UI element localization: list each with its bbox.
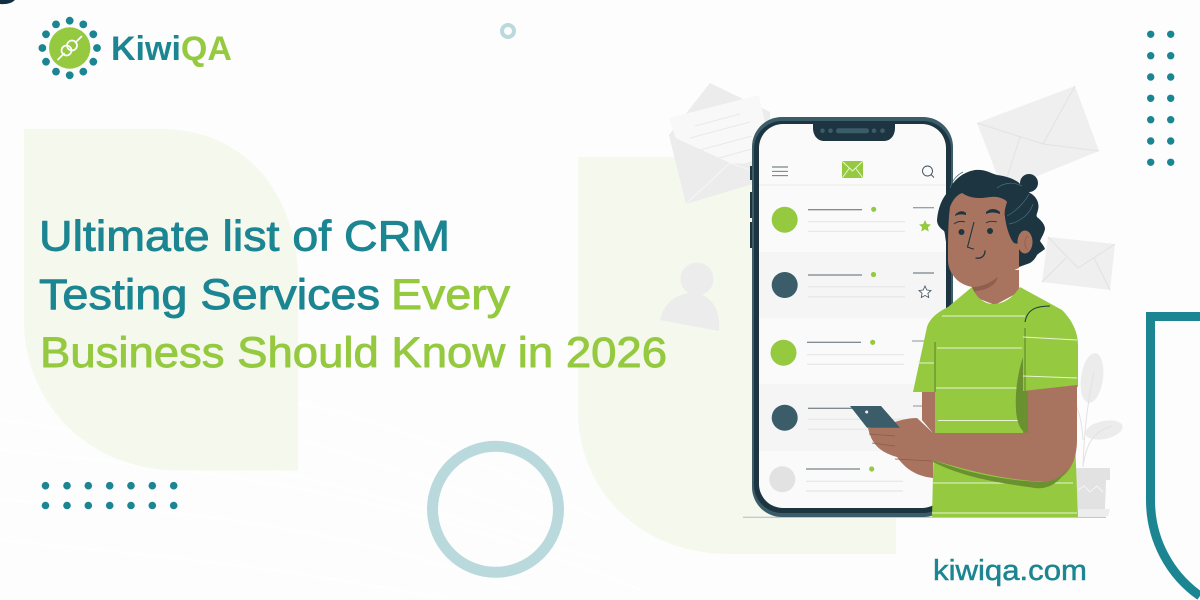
phone <box>750 117 953 517</box>
phone notch <box>813 124 895 141</box>
ear <box>1018 230 1032 254</box>
hair <box>937 170 1045 267</box>
open envelope with letter <box>669 83 772 204</box>
person <box>850 170 1078 517</box>
eyes and brows <box>954 209 1000 235</box>
shirt <box>913 287 1078 517</box>
neck <box>972 270 1019 305</box>
website url: kiwiqa.com <box>933 555 1087 587</box>
logo: KiwiQA <box>38 17 232 79</box>
neck shadow <box>972 277 998 292</box>
row 1 <box>772 207 934 233</box>
search icon <box>922 166 934 178</box>
dot grid: top right <box>1147 31 1174 166</box>
row 2 <box>772 272 934 298</box>
dot grid: bottom left <box>42 482 178 509</box>
handheld phone <box>850 406 900 428</box>
decorative small ring <box>502 25 514 37</box>
hair strands <box>950 172 1033 224</box>
title line 3: Business Should Know in 2026 <box>40 329 667 377</box>
decorative large ring <box>432 446 558 572</box>
background user silhouette <box>660 262 719 331</box>
shirt stripes <box>918 316 1077 513</box>
row 5 <box>769 466 903 492</box>
title line 1: Ultimate list of CRM <box>39 213 450 261</box>
row 3 <box>770 340 933 366</box>
forearm shadow <box>933 460 1068 488</box>
arm and hand <box>868 385 1077 482</box>
plant in pot <box>1070 352 1124 516</box>
large envelope <box>977 86 1099 190</box>
mail icon <box>842 161 863 178</box>
phone side buttons <box>750 166 753 248</box>
row 4 <box>772 405 934 431</box>
title line 2 green: Every <box>391 271 511 319</box>
face <box>948 193 1019 287</box>
logo icon <box>38 17 101 79</box>
floor line <box>743 516 1106 518</box>
logo wordmark: QA <box>181 30 232 68</box>
hamburger menu icon <box>772 167 788 176</box>
title line 2 teal: Testing Services <box>39 271 380 319</box>
nose <box>968 222 974 249</box>
phone body <box>752 117 953 517</box>
background panel: right green shape <box>578 157 896 554</box>
sleeve shadow <box>1016 357 1028 433</box>
logo wordmark: Kiwi <box>111 30 181 68</box>
phone screen <box>759 124 946 508</box>
corner mark <box>0 0 15 4</box>
teal corner outline shape <box>1150 316 1200 596</box>
illustration: person with phone <box>660 83 1124 517</box>
list row shading <box>759 252 946 451</box>
title <box>39 213 667 377</box>
small envelope <box>1042 237 1115 290</box>
background panel: left green shape <box>24 129 298 470</box>
mouth <box>976 251 985 258</box>
